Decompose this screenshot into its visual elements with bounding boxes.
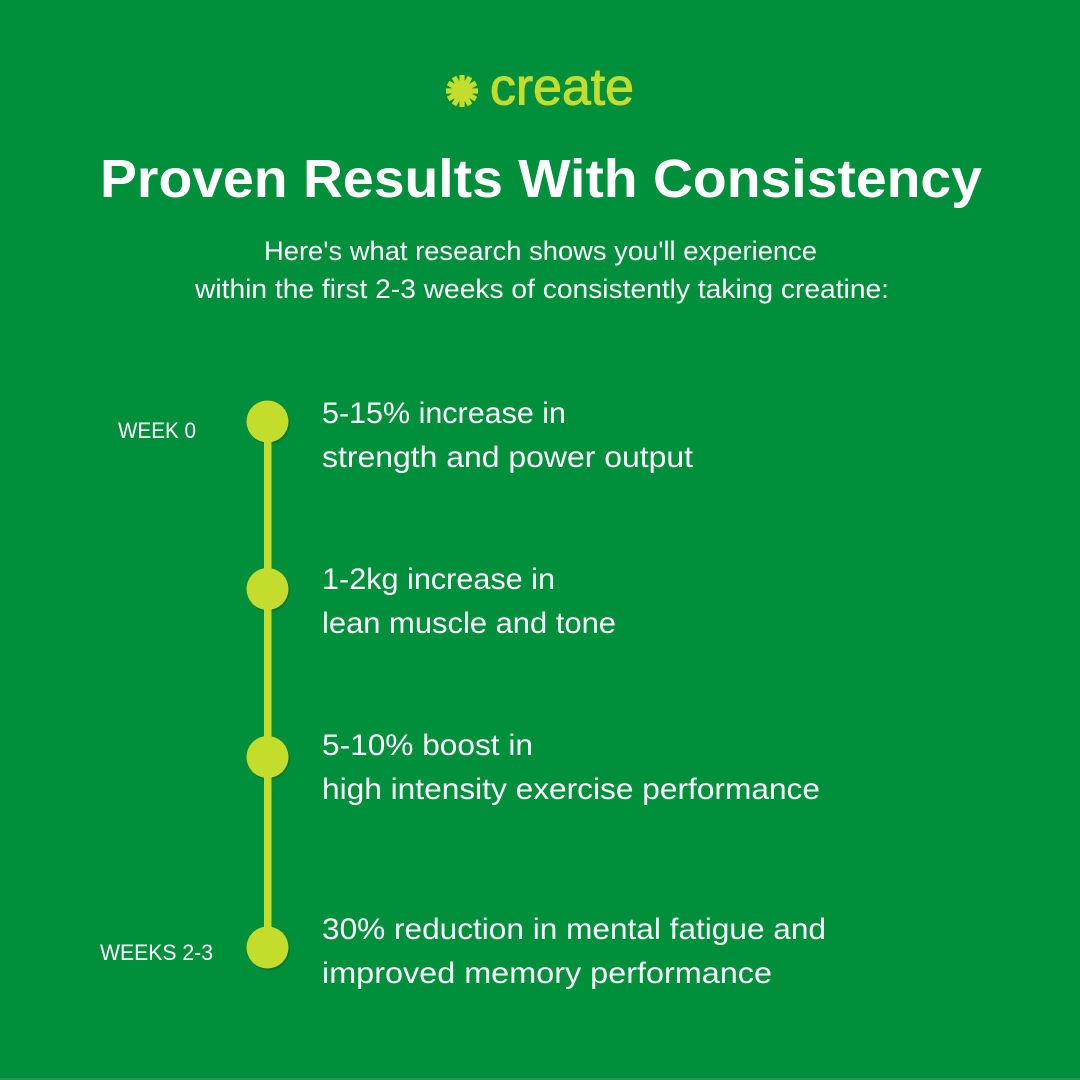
result: mental fatigue xyxy=(322,913,826,990)
result: lean muscle: lean muscle and tone xyxy=(322,607,616,640)
subtitle: within the first 2-3 weeks of consistently taking creatine: xyxy=(194,274,889,304)
timeline marker: muscle xyxy=(246,736,288,778)
result: lean muscle xyxy=(322,563,616,640)
result: mental fatigue: 30% reduction in mental fatigue and xyxy=(322,913,826,946)
result: strength and power: strength and power output xyxy=(322,441,694,474)
timeline marker: week 0 xyxy=(246,400,288,442)
result: exercise performance xyxy=(322,729,820,806)
timeline marker: strength xyxy=(246,568,288,610)
label: weeks 2-3: WEEKS 2-3 xyxy=(100,940,213,965)
icon: logo burst xyxy=(446,75,478,107)
subtitle xyxy=(194,236,889,304)
result: mental fatigue: improved memory performance xyxy=(322,957,772,990)
label: week 0: WEEK 0 xyxy=(118,418,196,443)
result: exercise performance: high intensity exercise performance xyxy=(322,773,820,806)
timeline xyxy=(246,400,290,970)
logo wordmark: create xyxy=(490,58,634,116)
result: strength and power xyxy=(322,397,694,474)
logo xyxy=(446,58,634,116)
title: Proven Results With Consistency xyxy=(100,149,982,209)
result: strength and power: 5-15% increase in xyxy=(322,397,566,430)
result: lean muscle: 1-2kg increase in xyxy=(322,563,555,596)
subtitle: Here's what research shows you'll experience xyxy=(264,236,817,266)
result: exercise performance: 5-10% boost in xyxy=(322,729,533,762)
timeline marker: weeks 2-3 xyxy=(246,926,288,968)
timeline line xyxy=(264,425,272,947)
